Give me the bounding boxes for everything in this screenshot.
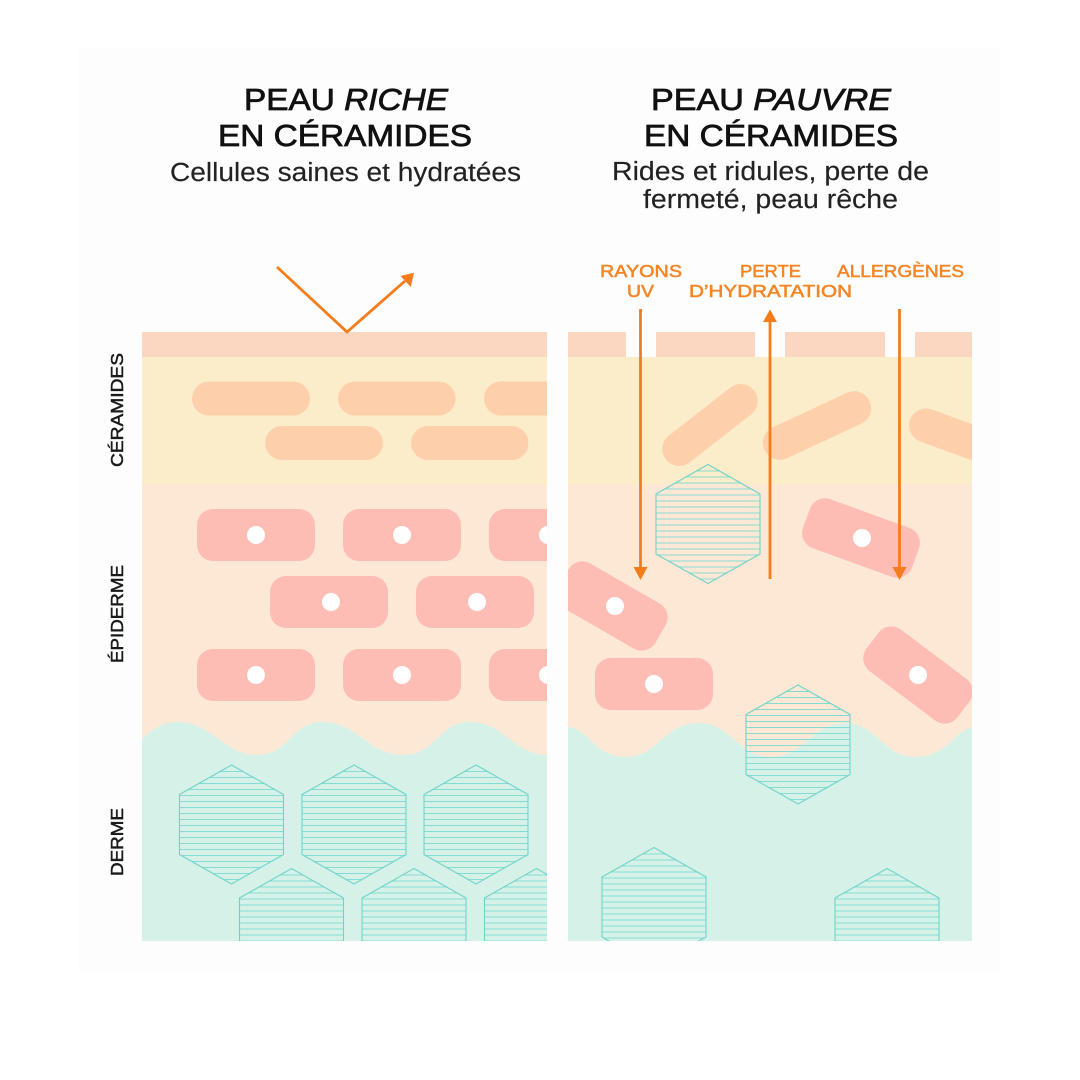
arrow: water loss up [763, 310, 777, 579]
scattered epidermal cells [551, 494, 979, 730]
label: rayons UV [600, 261, 682, 301]
title: rich skin: EN CÉRAMIDES [218, 118, 472, 153]
title: poor skin: PEAU PAUVRE [651, 83, 892, 117]
subtitle: poor skin: Rides et ridules, perte de [612, 158, 929, 186]
label: allergènes: ALLERGÈNES [837, 261, 964, 281]
panel: poor skin [568, 332, 972, 941]
ceramide layer [568, 357, 972, 484]
dermis layer [568, 723, 972, 941]
label: perte d'hydratation: D’HYDRATATION [689, 281, 852, 301]
label: rayons UV: RAYONS [600, 261, 682, 281]
title: poor skin [644, 83, 898, 153]
layer label: épiderme: ÉPIDERME [107, 565, 127, 663]
label: rayons UV: UV [627, 281, 654, 301]
arrow: UV rays down [634, 309, 648, 580]
ceramide layer [142, 357, 547, 484]
label: perte d'hydratation: PERTE [740, 261, 801, 281]
label: perte d'hydratation [689, 261, 852, 301]
scattered ceramide pills [662, 384, 972, 466]
dermis hexagons [178, 764, 547, 941]
epidermis layer [568, 484, 972, 774]
epidermal cells [197, 509, 547, 701]
title: rich skin [218, 83, 472, 153]
background card [78, 47, 1000, 972]
layer label: derme: DERME [107, 808, 127, 876]
subtitle: poor skin: fermeté, peau rêche [643, 186, 898, 214]
layer label: céramides: CÉRAMIDES [107, 353, 127, 467]
title: rich skin: PEAU RICHE [244, 83, 449, 117]
arrow: allergens down [892, 309, 906, 580]
ceramide pills [192, 382, 547, 460]
subtitle: poor skin [612, 158, 929, 214]
title: poor skin: EN CÉRAMIDES [644, 118, 898, 153]
panel: rich skin [142, 332, 547, 941]
subtitle: rich skin: Cellules saines et hydratées [170, 159, 521, 187]
arrow: reflected rays [277, 267, 414, 332]
dermis layer [142, 722, 547, 941]
broken surface strip [568, 332, 972, 357]
epidermis layer [142, 484, 547, 774]
scattered hexagons [602, 464, 939, 988]
surface strip [142, 332, 547, 357]
